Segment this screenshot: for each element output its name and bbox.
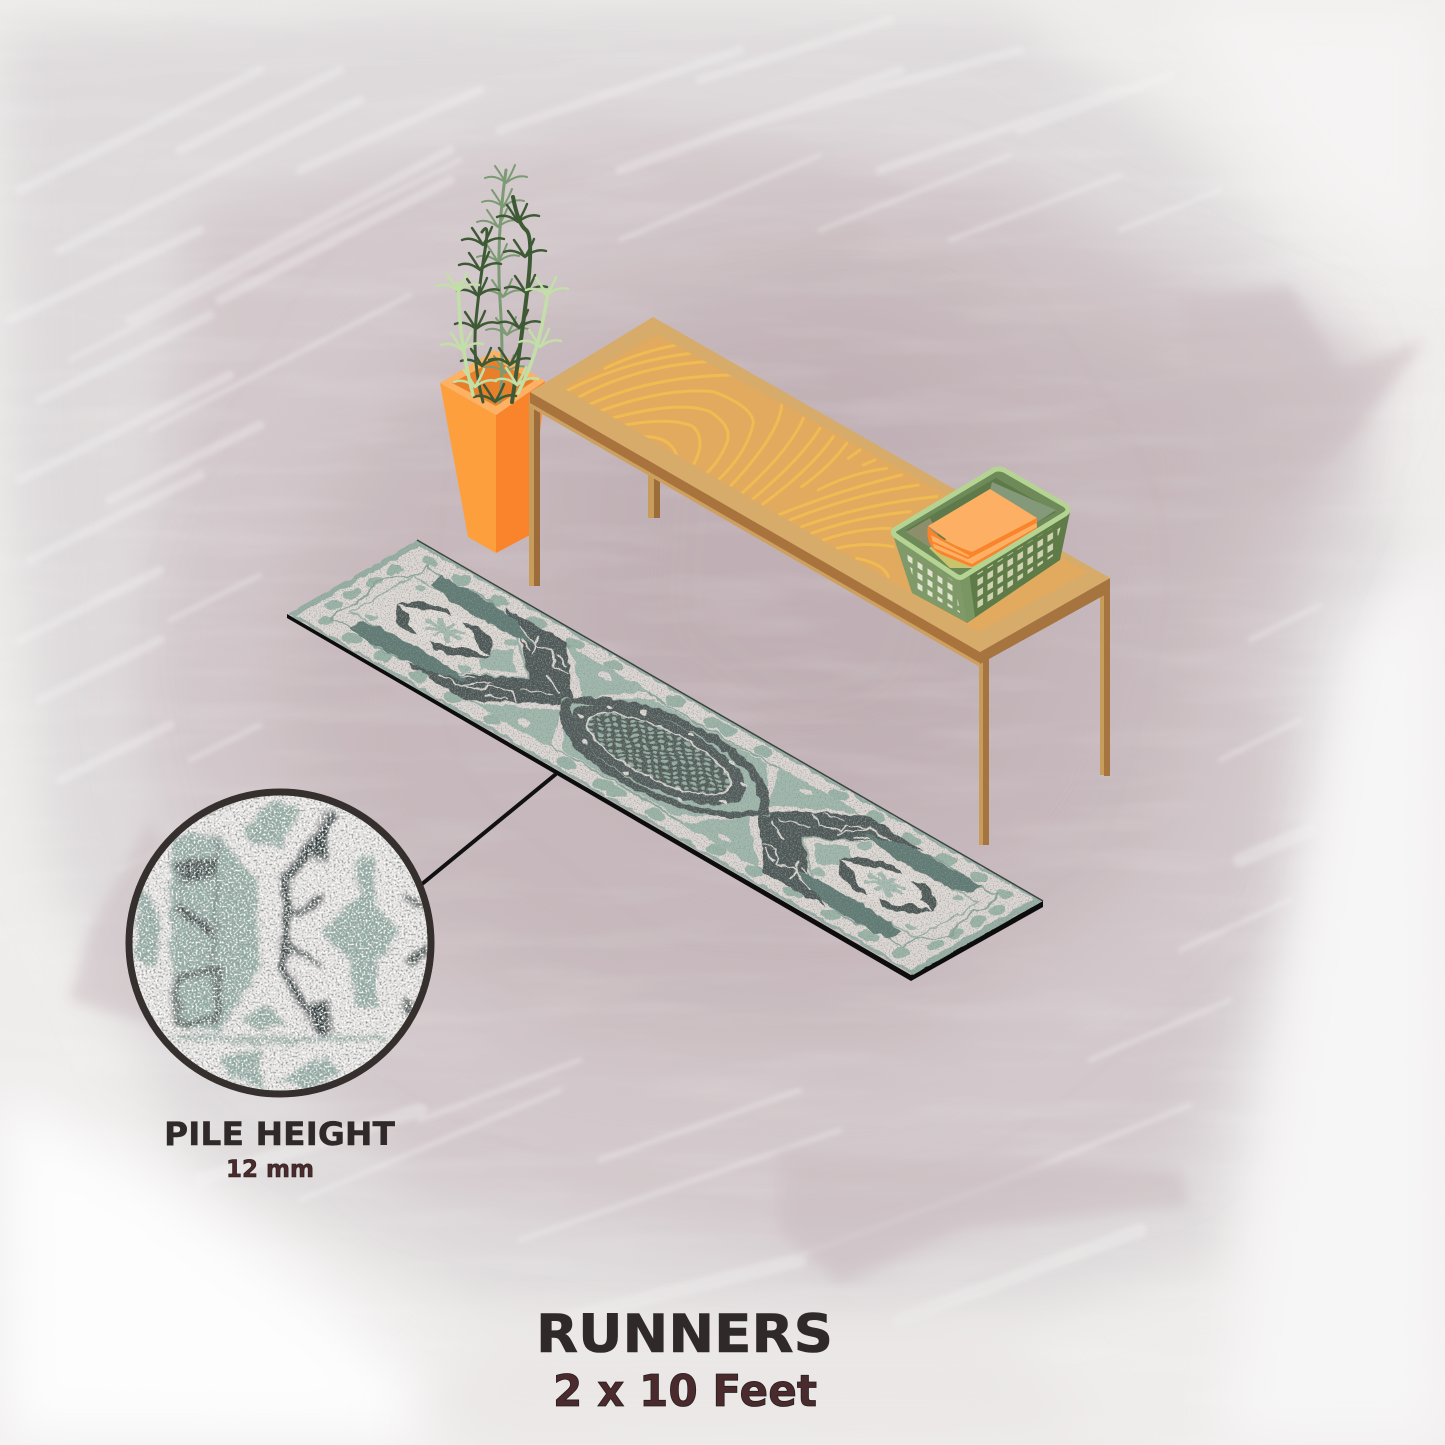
- table apron: [530, 392, 980, 667]
- rug pattern: [287, 540, 1043, 975]
- title: runners size: RUNNERS: [536, 1304, 833, 1365]
- text: pile height label: PILE HEIGHT: [164, 1115, 395, 1153]
- icon: orange planter: [440, 350, 545, 553]
- basket front faces: [892, 532, 967, 623]
- table top: [530, 317, 1110, 652]
- table left leg: [529, 398, 540, 586]
- rug edge shadow: [287, 614, 1043, 981]
- detail lens: pile close-up: [127, 787, 437, 1097]
- arrow: connector line from rug to detail: [422, 774, 556, 884]
- table front leg: [979, 655, 989, 845]
- jagged mauve brush ends: [70, 285, 1425, 1285]
- wood grain: [566, 344, 938, 578]
- text: pile height label: [164, 1115, 395, 1183]
- rug: [287, 540, 1043, 981]
- rug top edge: [417, 540, 1043, 901]
- table back leg: [648, 470, 660, 518]
- basket rim: [893, 469, 1068, 578]
- title: runners size: [536, 1304, 833, 1417]
- medallion: [561, 696, 770, 818]
- towels: [927, 489, 1037, 568]
- table right leg: [1100, 585, 1110, 776]
- text: pile height label: 12 mm: [226, 1155, 314, 1183]
- title: runners size: 2 x 10 Feet: [553, 1366, 817, 1417]
- table: [529, 317, 1110, 845]
- icon: laundry basket with towels: [892, 468, 1070, 623]
- icon: rosemary plant: [437, 165, 568, 402]
